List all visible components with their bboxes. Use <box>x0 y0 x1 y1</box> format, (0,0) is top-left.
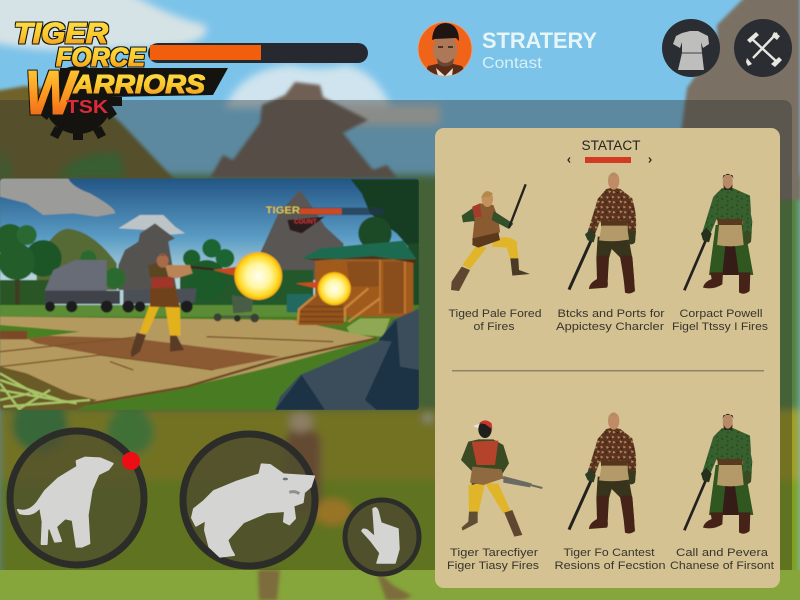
caption 6 <box>670 547 774 572</box>
caption 5: Resions of Fecstion <box>554 560 666 572</box>
logo: Tiger Force Warriors TSK <box>14 18 228 140</box>
caption 6: Chanese of Firsont <box>670 560 774 572</box>
muzzle blast small <box>295 272 351 305</box>
player name and role: STRATERY <box>482 28 597 53</box>
muzzle blast large <box>213 252 282 300</box>
panel heading: STATACT <box>582 138 640 153</box>
caption 1: of Fires <box>474 321 515 333</box>
avatar portrait <box>418 22 472 80</box>
heading underline and arrows <box>568 157 651 163</box>
icon: pointing hand <box>362 508 399 563</box>
caption 4: Tiger Tarecfiyer <box>450 547 538 559</box>
character: fighter with raised rifle <box>451 184 530 291</box>
foreground rock <box>275 308 419 410</box>
teal barrel <box>287 294 312 312</box>
scene mountains <box>37 190 347 290</box>
translucent dark overlay panel <box>0 100 792 570</box>
logo: Tiger Force Warriors TSK: TIGER <box>14 18 108 50</box>
scene trees <box>0 179 419 307</box>
cannon <box>214 295 259 322</box>
caption 1 <box>448 308 542 333</box>
armored trucks <box>45 260 197 313</box>
caption 4 <box>447 547 540 572</box>
scene enemy hud: TIGER <box>266 206 300 217</box>
wooden hut <box>298 241 417 337</box>
character: camo soldier row two <box>569 412 636 534</box>
caption 3: Figel Ttssy I Fires <box>672 321 769 333</box>
health bar <box>148 43 368 63</box>
tiger fighter <box>131 254 213 357</box>
control: pointing hand button <box>345 500 419 574</box>
gameplay scene <box>0 178 419 410</box>
logo: Tiger Force Warriors TSK: FORCE <box>56 42 146 72</box>
character: green coat soldier <box>684 174 753 294</box>
caption 6: Call and Pevera <box>676 547 769 559</box>
logo: Tiger Force Warriors TSK: W <box>25 59 79 128</box>
player name and role <box>482 28 597 72</box>
character: camo soldier <box>569 172 636 294</box>
scene enemy hud <box>266 206 383 233</box>
character: green soldier row two <box>684 414 753 534</box>
red alert dot <box>122 452 140 470</box>
caption 5 <box>554 547 666 572</box>
caption 3: Corpact Powell <box>680 308 762 320</box>
logo gear <box>39 66 228 140</box>
scene enemy hud: COUNT <box>294 218 317 225</box>
control: leaping tiger button <box>183 434 315 566</box>
panel: character roster <box>435 128 780 588</box>
control: standing tiger button <box>10 431 144 565</box>
caption 5: Tiger Fo Cantest <box>564 547 654 559</box>
player name and role: Contast <box>482 55 543 72</box>
caption 2 <box>556 308 665 333</box>
tiger silhouette standing <box>18 458 113 547</box>
caption 1: Tiged Pale Fored <box>448 308 542 320</box>
logo: Tiger Force Warriors TSK: ARRIORS <box>72 69 206 99</box>
tiger silhouette leaping <box>192 464 314 557</box>
caption 2: Btcks and Ports for <box>558 308 665 320</box>
scene clouds <box>0 178 185 235</box>
caption 3 <box>672 308 769 333</box>
caption 4: Figer Tiasy Fires <box>447 560 540 572</box>
caption 2: Appictesy Charcler <box>556 321 664 333</box>
logo: Tiger Force Warriors TSK: TSK <box>66 97 108 117</box>
scene ground <box>0 305 419 410</box>
icon: crossed hammers button <box>734 19 792 77</box>
icon: armor button <box>662 19 720 77</box>
character: helmeted gunner <box>461 420 542 537</box>
